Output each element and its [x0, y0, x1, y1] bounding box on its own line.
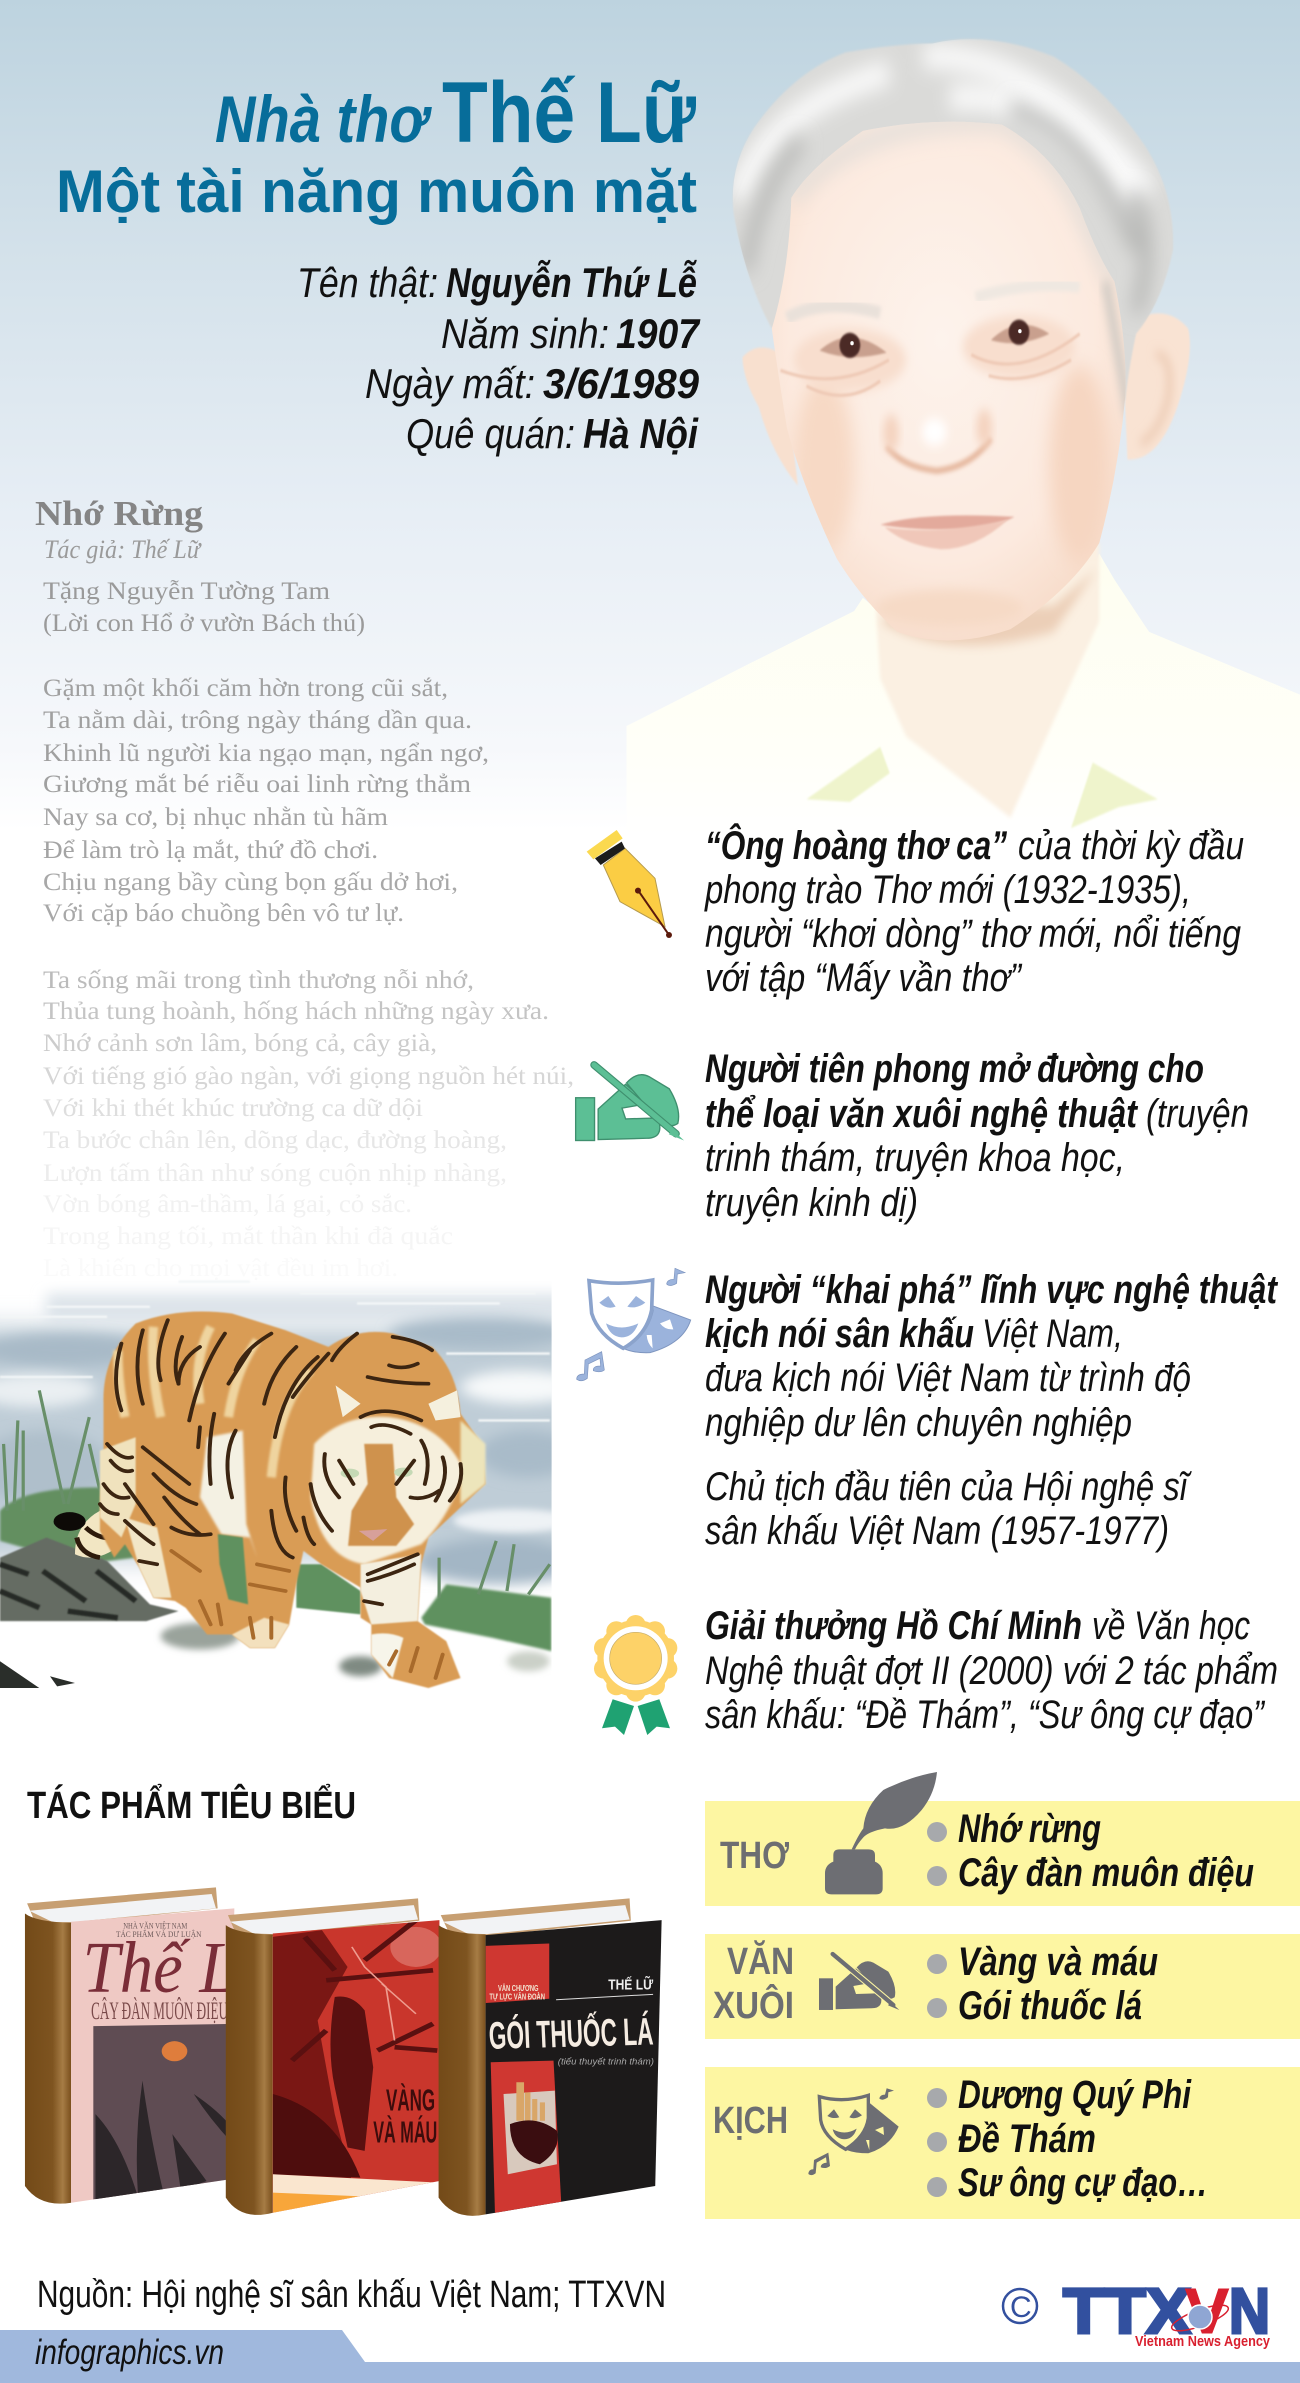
poem: Nhớ Rừng: Với khi thét khúc trường ca dữ dội: [43, 1095, 423, 1122]
text block: Ông hoàng thơ ca: với tập “Mấy vần thơ”: [705, 956, 1022, 1000]
footer website: infographics.vn: [35, 2333, 224, 2372]
label: THƠ: THƠ: [720, 1835, 789, 1877]
bullet list: Sư ông cự đạo…: [958, 2161, 1208, 2205]
text block: Ông hoàng thơ ca: phong trào Thơ mới (1932-1935),: [704, 868, 1191, 912]
bullet list: [927, 1807, 1254, 1895]
TTXVN logo: Vietnam News Agency: [1135, 2333, 1271, 2350]
bullet list: Dương Quý Phi: [958, 2073, 1192, 2117]
book: Cây đàn muôn điệu: Thế L: [83, 1928, 236, 2009]
book: Cây đàn muôn điệu: TÁC PHẨM VÀ DƯ LUẬN: [116, 1928, 201, 1940]
title line 1: [215, 65, 697, 161]
label: VĂN XUÔI: VĂN: [727, 1939, 794, 1983]
biography details: 1907: [616, 310, 700, 357]
biography details: Năm sinh:: [441, 310, 609, 357]
poem: Nhớ Rừng: Chịu ngang bầy cùng bọn gấu dở hơi,: [43, 869, 458, 896]
book: Gói thuốc lá: THẾ LỮ: [608, 1976, 653, 1993]
text: GÓI THUỐC LÁ: [488, 2009, 654, 2058]
book: Gói thuốc lá: VĂN CHƯƠNG: [498, 1984, 539, 1993]
title line 1: Thế Lữ: [442, 65, 697, 161]
text block: Người khai phá: sân khấu Việt Nam (1957-1977): [705, 1509, 1169, 1553]
bullet list: Nhớ rừng: [958, 1807, 1101, 1851]
title line 1: Nhà thơ: [215, 82, 433, 156]
label: VĂN XUÔI: [713, 1939, 794, 2027]
eyebrows: [787, 306, 880, 318]
label: KỊCH: KỊCH: [713, 2100, 788, 2142]
poem: Nhớ Rừng: Trong hang tối, mắt thần khi đã quắc: [43, 1223, 453, 1250]
heading: representative works: TÁC PHẨM TIÊU BIỂU: [27, 1782, 356, 1827]
text block: Giải thưởng Hồ Chí Minh: [705, 1604, 1278, 1737]
poem: Nhớ Rừng: Ta nằm dài, trông ngày tháng dần qua.: [43, 707, 472, 734]
poem: Nhớ Rừng: Với cặp báo chuồng bên vô tư lự.: [43, 900, 404, 927]
icon: theatre masks blue: [577, 1268, 691, 1381]
face: [772, 122, 1126, 640]
text block: Người tiên phong: trinh thám, truyện khoa học,: [705, 1136, 1125, 1180]
poem: Nhớ Rừng: Tác giả: Thế Lữ: [44, 535, 202, 564]
poem: Nhớ Rừng: Là khiến cho mọi vật đều im hơi.: [43, 1255, 398, 1282]
poem: Nhớ Rừng: (Lời con Hổ ở vườn Bách thú): [43, 610, 365, 637]
label: VĂN XUÔI: XUÔI: [713, 1982, 794, 2027]
panel: drama works: [705, 2067, 1300, 2219]
poem: Nhớ Rừng: Khinh lũ người kia ngạo mạn, ngẩn ngơ,: [43, 740, 489, 767]
panel: prose works: [705, 1934, 1300, 2039]
poem: Nhớ Rừng: Lượn tấm thân như sóng cuộn nhịp nhàng,: [43, 1160, 507, 1187]
text block: Người tiên phong: truyện kinh dị): [705, 1181, 918, 1225]
stripes: [100, 1320, 461, 1678]
icon: theatre masks: [808, 2088, 899, 2175]
book: Cây đàn muôn điệu: NHÀ VĂN VIỆT NAM: [123, 1921, 187, 1931]
text block: Người tiên phong: thể loại văn xuôi nghệ thuật: [705, 1092, 1138, 1136]
TTXVN logo: [1063, 2275, 1271, 2350]
book: Gói thuốc lá: [439, 1898, 662, 2216]
text block: Người tiên phong: [705, 1047, 1249, 1225]
icon: writing hand green: [576, 1065, 684, 1140]
poem: Nhớ Rừng: Giương mắt bé riễu oai linh rừng thẳm: [43, 771, 472, 798]
bullet list: Đề Thám: [958, 2117, 1096, 2161]
tiger illustration: [0, 1282, 643, 1688]
source line: Nguồn: Hội nghệ sĩ sân khấu Việt Nam; TTXVN: [37, 2274, 666, 2316]
biography details: [297, 258, 700, 457]
poem: Nhớ Rừng: [35, 494, 574, 1282]
tiger tail: [54, 1511, 121, 1558]
copyright symbol: C: [1010, 2291, 1032, 2324]
poem: Nhớ Rừng: Ta bước chân lên, dõng dạc, đường hoàng,: [43, 1127, 507, 1154]
biography details: Nguyễn Thứ Lễ: [446, 258, 698, 306]
text block: Người tiên phong: (truyện: [1146, 1092, 1249, 1136]
page background gradient: [0, 0, 1300, 830]
text block: Giải thưởng Hồ Chí Minh: Giải thưởng Hồ Chí Minh: [705, 1604, 1082, 1648]
biography details: 3/6/1989: [543, 360, 700, 407]
mouth: [880, 515, 1015, 530]
text block: Người khai phá: Chủ tịch đầu tiên của Hội nghệ sĩ: [705, 1465, 1192, 1509]
icon: fountain pen nib: [587, 830, 672, 938]
TTXVN logo: V: [1185, 2275, 1229, 2347]
poem: Nhớ Rừng: Thủa tung hoành, hống hách những ngày xưa.: [43, 998, 549, 1025]
book: Cây đàn muôn điệu: [25, 1887, 236, 2204]
title: [56, 65, 697, 225]
poem: Nhớ Rừng: Vờn bóng âm-thầm, lá gai, cỏ sắc.: [43, 1191, 412, 1218]
hair: [733, 39, 1173, 402]
rocks: [0, 1538, 179, 1621]
collar: [806, 747, 890, 802]
poem: Nhớ Rừng: Nhớ Rừng: [35, 494, 204, 533]
book covers: CÂY ĐÀN MUÔN ĐIỆU: [91, 1996, 228, 2025]
text block: Ông hoàng thơ ca: [704, 822, 1244, 1000]
poem: Nhớ Rừng: Nay sa cơ, bị nhục nhằn tù hãm: [43, 804, 389, 831]
portrait photo of Thế Lữ: [627, 39, 1300, 836]
footer bar: [0, 2330, 1300, 2383]
book: Gói thuốc lá: (tiểu thuyết trinh thám): [558, 2057, 654, 2067]
book: Vàng và máu: [226, 1898, 442, 2215]
ears: [742, 347, 798, 485]
panel: poetry works: [705, 1772, 1300, 1906]
TTXVN logo: N: [1229, 2275, 1270, 2347]
text block: Người khai phá: Việt Nam,: [982, 1312, 1123, 1356]
tiger body: [100, 1312, 486, 1688]
bullet list: [927, 2073, 1208, 2205]
book covers: VÀ MÁU: [373, 2115, 437, 2149]
text block: Người khai phá: đưa kịch nói Việt Nam từ trình độ: [705, 1356, 1191, 1400]
copyright symbol: [1003, 2289, 1037, 2324]
icon: quill and inkwell: [825, 1772, 937, 1894]
grass gap between legs: [218, 1534, 248, 1604]
title line 2: Một tài năng muôn mặt: [56, 158, 697, 225]
biography details: Tên thật:: [297, 259, 438, 306]
nose: [887, 438, 991, 471]
shirt: [627, 553, 1300, 836]
TTXVN logo: TTX: [1063, 2275, 1191, 2347]
neck: [876, 543, 1099, 818]
poem: Nhớ Rừng: Tặng Nguyễn Tường Tam: [43, 578, 331, 605]
text block: Người khai phá: nghiệp dư lên chuyên nghiệp: [705, 1401, 1132, 1445]
bullet list: Vàng và máu: [958, 1940, 1158, 1984]
fur highlights: [118, 1327, 311, 1477]
bullet list: [927, 1940, 1158, 2028]
text block: Người khai phá: [705, 1268, 1278, 1553]
book: Gói thuốc lá: TỰ LỰC VĂN ĐOÀN: [489, 1992, 545, 2001]
eyes: [341, 1469, 359, 1478]
text block: Người khai phá: kịch nói sân khấu: [705, 1312, 974, 1356]
grass and ground: [0, 1390, 552, 1688]
eyes: [820, 337, 887, 357]
text block: Giải thưởng Hồ Chí Minh: về Văn học: [1092, 1604, 1250, 1648]
biography details: Hà Nội: [583, 410, 699, 457]
poem: Nhớ Rừng: Để làm trò lạ mắt, thứ đồ chơi.: [43, 837, 378, 864]
biography details: Quê quán:: [406, 410, 575, 457]
book: Vàng và máu: VÀNG: [386, 2083, 435, 2118]
muzzle and nose: [348, 1444, 414, 1546]
poem: Nhớ Rừng: Nhớ cảnh sơn lâm, bóng cả, cây già,: [43, 1030, 437, 1057]
icon: writing hand: [819, 1954, 899, 2010]
icon: award medal: [594, 1615, 677, 1735]
poem: Nhớ Rừng: Ta sống mãi trong tình thương nỗi nhớ,: [43, 967, 474, 994]
poem: Nhớ Rừng: Gặm một khối căm hờn trong cũi sắt,: [43, 675, 448, 702]
biography details: Ngày mất:: [365, 360, 535, 407]
poem: Nhớ Rừng: Với tiếng gió gào ngàn, với giọng nguồn hét núi,: [43, 1063, 574, 1090]
book covers: [25, 1887, 662, 2216]
sky: [0, 1281, 552, 1592]
bullet list: Gói thuốc lá: [958, 1984, 1142, 2028]
text block: Ông hoàng thơ ca: của thời kỳ đầu: [1018, 824, 1244, 868]
text block: Ông hoàng thơ ca: “Ông hoàng thơ ca”: [705, 822, 1007, 868]
